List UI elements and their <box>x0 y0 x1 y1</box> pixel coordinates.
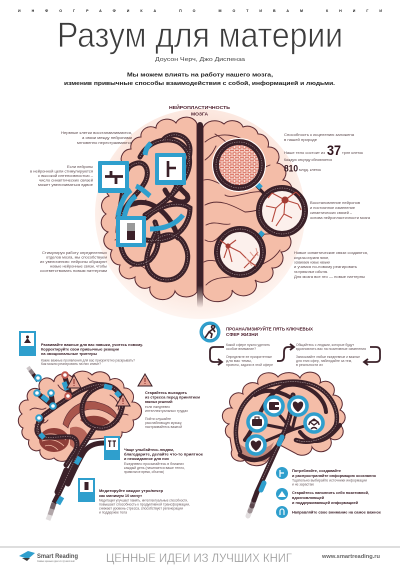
text: choose sphere: проекты, задачи в этой сфере <box>226 363 273 367</box>
arrow: left bracket <box>210 347 224 365</box>
text: stimulated neurons <box>30 164 94 187</box>
magnifier: neuron <box>259 188 305 234</box>
text: healing ability <box>284 132 355 142</box>
brain stem <box>70 427 88 452</box>
text: healing ability: в нашей природе <box>284 137 318 142</box>
text: meditate: Медитируйте каждое утро/вечер <box>99 488 164 493</box>
text: consume consciously: и распространяйте информацию осознанно <box>292 473 377 478</box>
circle: care <box>305 414 323 432</box>
logo: Smart Reading <box>19 551 78 563</box>
icon: direction <box>276 467 288 479</box>
blue road sections <box>40 382 120 438</box>
text: restoring neurons: основа нейропластичности мозга <box>310 215 371 220</box>
text: meditate <box>99 488 190 514</box>
text: nerve cells: мгновенно перестраиваются <box>77 140 132 145</box>
blue road sections <box>145 143 151 155</box>
text: exit stress: интеллектуальных трудах <box>145 409 188 413</box>
circle: wallet <box>265 397 283 415</box>
text: stimulated neurons: число синаптических связей <box>39 178 93 182</box>
stat: 37 trillion cells: трлн клеток <box>342 150 363 155</box>
warning triangle on road <box>67 375 81 388</box>
text: develop skills: Развивайте важные для вас навыки, учитесь новому. <box>41 342 143 347</box>
text: exit stress: расслабляющую музыку, <box>145 421 182 425</box>
stat: 37 trillion cells <box>284 142 363 158</box>
peach halo <box>95 109 305 319</box>
text: fill with positive <box>292 490 369 505</box>
magnifier: neuron pair <box>217 229 263 275</box>
icon: person at circle <box>200 322 220 342</box>
text: communicate: Записывайте любые ежедневные и важные <box>296 355 360 359</box>
title: Разум для материи <box>57 16 343 55</box>
text: exit stress: из стресса перед принятием <box>145 394 200 400</box>
text: meditate: снижает уровень стресса, способствует регенерации <box>99 506 183 510</box>
text: new synaptic connections: Для мозга все это — новые паттерны <box>294 274 365 279</box>
text: stimulation of brain regions: соответствовать новым паттернам <box>40 268 107 273</box>
text: stimulated neurons: с высокой интенсивностью – <box>38 173 94 178</box>
inner structures <box>80 416 110 426</box>
central divider <box>197 122 203 308</box>
logo: Smart Reading: Smart Reading <box>37 554 78 560</box>
text: choose sphere: особое внимание? <box>226 347 256 351</box>
text: meditate: повышает способность к продуктивной трансформации, <box>99 502 190 506</box>
text: stimulation of brain regions: их увеличению: нейроны образуют <box>40 259 107 264</box>
section heading: neuroplasticity <box>169 103 231 118</box>
text: new synaptic connections: Новые синаптические связи создаются, <box>294 250 368 255</box>
stat: 810 billion cells: Каждую секунду обновляется <box>284 157 332 162</box>
text: consume consciously: Тщательно выбирайте источники информации <box>292 478 367 482</box>
text: stimulated neurons: в нейронной цепи стимулируются <box>30 168 93 174</box>
text: nerve cells: а связи между нейронами <box>82 135 132 140</box>
sign: T junction <box>155 153 186 185</box>
text: smile more: каждый день (начинается ваше тепло, <box>124 466 185 470</box>
text: exit stress: настраивайтесь важной <box>145 425 182 429</box>
text: exit stress <box>145 390 200 429</box>
lead text: Мы можем влиять на работу нашего мозга, <box>127 72 274 78</box>
text: new synaptic connections: и учимся по-новому реагировать <box>294 264 357 269</box>
text: smile more: благодарите, делайте что-то приятное <box>124 452 204 456</box>
text: smile more: Чаще улыбайтесь людям, <box>124 447 174 452</box>
text: consume consciously: и не зарастаю <box>292 482 315 486</box>
text: healing ability: Способность к исцелению заложена <box>284 132 355 137</box>
warning triangle at end of road <box>116 394 130 406</box>
text: stimulated neurons: может увеличиваться вдвое <box>38 182 94 187</box>
icon: wellbeing <box>276 488 288 500</box>
lead text <box>64 72 336 87</box>
stat: 810 billion cells <box>284 157 332 174</box>
top caption: ИНФОГРАФИКА ПО МОТИВАМ КНИГИ <box>18 9 382 13</box>
cerebellum <box>39 428 69 452</box>
text: consume consciously: Потребляйте, создавайте <box>292 468 342 473</box>
text: stimulation of brain regions <box>40 250 107 273</box>
heading: five spheres: ПРОАНАЛИЗИРУЙТЕ ПЯТЬ КЛЮЧЕВЫХ <box>226 326 313 332</box>
circle: heart <box>247 436 265 454</box>
brain shape <box>18 371 142 461</box>
route pins <box>34 372 71 421</box>
road network <box>118 135 190 280</box>
sign: person at board <box>19 331 36 356</box>
text: meditate: как минимум 10 минут <box>99 493 142 498</box>
text: stimulation of brain regions: отделов мозга, мы способствуем <box>46 254 107 260</box>
sign: crossroads <box>98 161 129 193</box>
text: restoring neurons <box>310 200 371 220</box>
text: restoring neurons: синаптических связей – <box>310 210 353 215</box>
text: restoring neurons: Восстановление нейронов <box>310 200 360 205</box>
magnifier: cells <box>212 138 270 200</box>
icon: warning triangle <box>138 374 152 386</box>
text: communicate: для этих сфер, наблюдайте за тем, <box>296 359 352 363</box>
right hemisphere folds <box>204 134 286 285</box>
text: smile more <box>124 447 204 474</box>
corpus callosum <box>63 401 119 428</box>
panel: bottom right brain <box>222 372 345 516</box>
logo: Smart Reading: Самые ценные идеи из лучших книг <box>37 559 75 563</box>
text: exit stress: важных решений: <box>145 399 173 404</box>
road network <box>37 377 123 520</box>
text: choose sphere: Определите ее приоритетные <box>226 355 272 359</box>
circle: health <box>289 397 307 415</box>
text: new synaptic connections: когда мы изучаем новое, <box>294 255 329 260</box>
text: stimulated neurons: Если нейроны <box>67 164 93 169</box>
text: stimulation of brain regions: новые нейронные связи, чтобы <box>50 264 107 268</box>
text: fill with positive: вдохновляющей <box>292 495 325 500</box>
text: develop skills <box>41 342 143 366</box>
text: develop skills: Какие важные проявления для вас приоритетно раскрывать? <box>41 358 135 362</box>
text: smile more: и неожиданное для них <box>124 456 170 461</box>
sign: two T <box>104 436 120 460</box>
text: new synaptic connections: осваиваем новые навыки <box>294 260 330 264</box>
stat: 810 billion cells: 810 <box>284 164 298 174</box>
text: develop skills: Корректируйте свои привычные реакции <box>41 346 120 352</box>
text: choose sphere: Какой сфере нужно уделить <box>226 343 270 347</box>
text: new synaptic connections: на привычные события. <box>294 269 328 274</box>
brain shape <box>222 372 345 466</box>
arrow: right bracket <box>364 347 380 365</box>
road network <box>236 382 340 516</box>
text: exit stress: Старайтесь выходить <box>145 390 188 395</box>
heading: five spheres: СФЕР ЖИЗНИ <box>226 332 258 337</box>
stat: 810 billion cells: млрд. клеток <box>299 167 321 172</box>
text: communicate: Общайтесь с людьми, которые будут <box>296 343 354 347</box>
lead text: изменив привычные способы взаимодействия с собой, информацией и людьми. <box>64 80 336 87</box>
section heading: neuroplasticity: МОЗГА <box>191 112 209 118</box>
text: fill with positive: и поддерживающей информацией <box>292 500 359 505</box>
text: direct attention: Направляйте свое внимание на самое важное <box>292 510 382 514</box>
heading: five spheres <box>226 326 313 337</box>
text: meditate: Медитация улучшает память, интеллектуальные способности, <box>99 498 188 502</box>
text: fill with positive: Старайтесь наполнить себя позитивной, <box>292 490 369 495</box>
text: new synaptic connections <box>294 250 368 279</box>
text: stimulation of brain regions: Стимулируя работу определенных <box>42 250 107 255</box>
text: consume consciously <box>292 468 377 486</box>
text: develop skills: Как можно реагировать на них иначе? <box>41 362 101 366</box>
icon: attention <box>276 506 288 518</box>
text: communicate: в реальности их <box>296 363 323 367</box>
text: communicate <box>296 343 366 367</box>
left hemisphere <box>101 117 197 300</box>
sign: road column <box>116 216 146 247</box>
text: communicate: вдохновлять вас на позитивные изменения <box>296 347 366 351</box>
section heading: neuroplasticity: НЕЙРОПЛАСТИЧНОСТЬ <box>169 103 231 111</box>
footer divider <box>0 546 400 548</box>
text: smile more: правильное время, объятия) <box>124 470 164 474</box>
text: meditate: и поддержке тела <box>99 510 127 514</box>
right hemisphere <box>203 121 294 302</box>
text: develop skills: на эмоциональные триггеры <box>41 351 98 356</box>
text: restoring neurons: и постоянное изменение <box>310 205 356 210</box>
authors: Доусон Черч, Джо Диспенза <box>155 57 245 63</box>
footer url: www.smartreading.ru <box>321 554 381 560</box>
text: exit stress: Пойти слушайте <box>145 417 171 421</box>
arrow: s curve <box>277 344 294 361</box>
footer slogan: ЦЕННЫЕ ИДЕИ ИЗ ЛУЧШИХ КНИГ <box>106 553 293 565</box>
text: smile more: Ежедневно просыпайтесь в ближних <box>124 462 184 466</box>
sign: fuel <box>78 478 95 502</box>
text: choose sphere: для вас темы, <box>226 359 252 363</box>
text: choose sphere <box>226 343 273 367</box>
cerebellum <box>238 442 274 462</box>
text: nerve cells: Нервные клетки восстанавливаются, <box>61 130 132 135</box>
stat: 37 trillion cells: Наше тело состоит из <box>284 150 325 155</box>
panel: bottom left brain <box>18 367 142 520</box>
stub road from top <box>28 367 38 381</box>
text: exit stress: если ежедневно <box>145 405 170 409</box>
brain folds <box>30 378 128 425</box>
panel: top brain <box>95 109 305 319</box>
stat: 37 trillion cells: 37 <box>327 142 341 158</box>
text: nerve cells <box>61 130 132 145</box>
left hemisphere folds <box>115 200 152 276</box>
circle: briefcase <box>248 413 266 431</box>
